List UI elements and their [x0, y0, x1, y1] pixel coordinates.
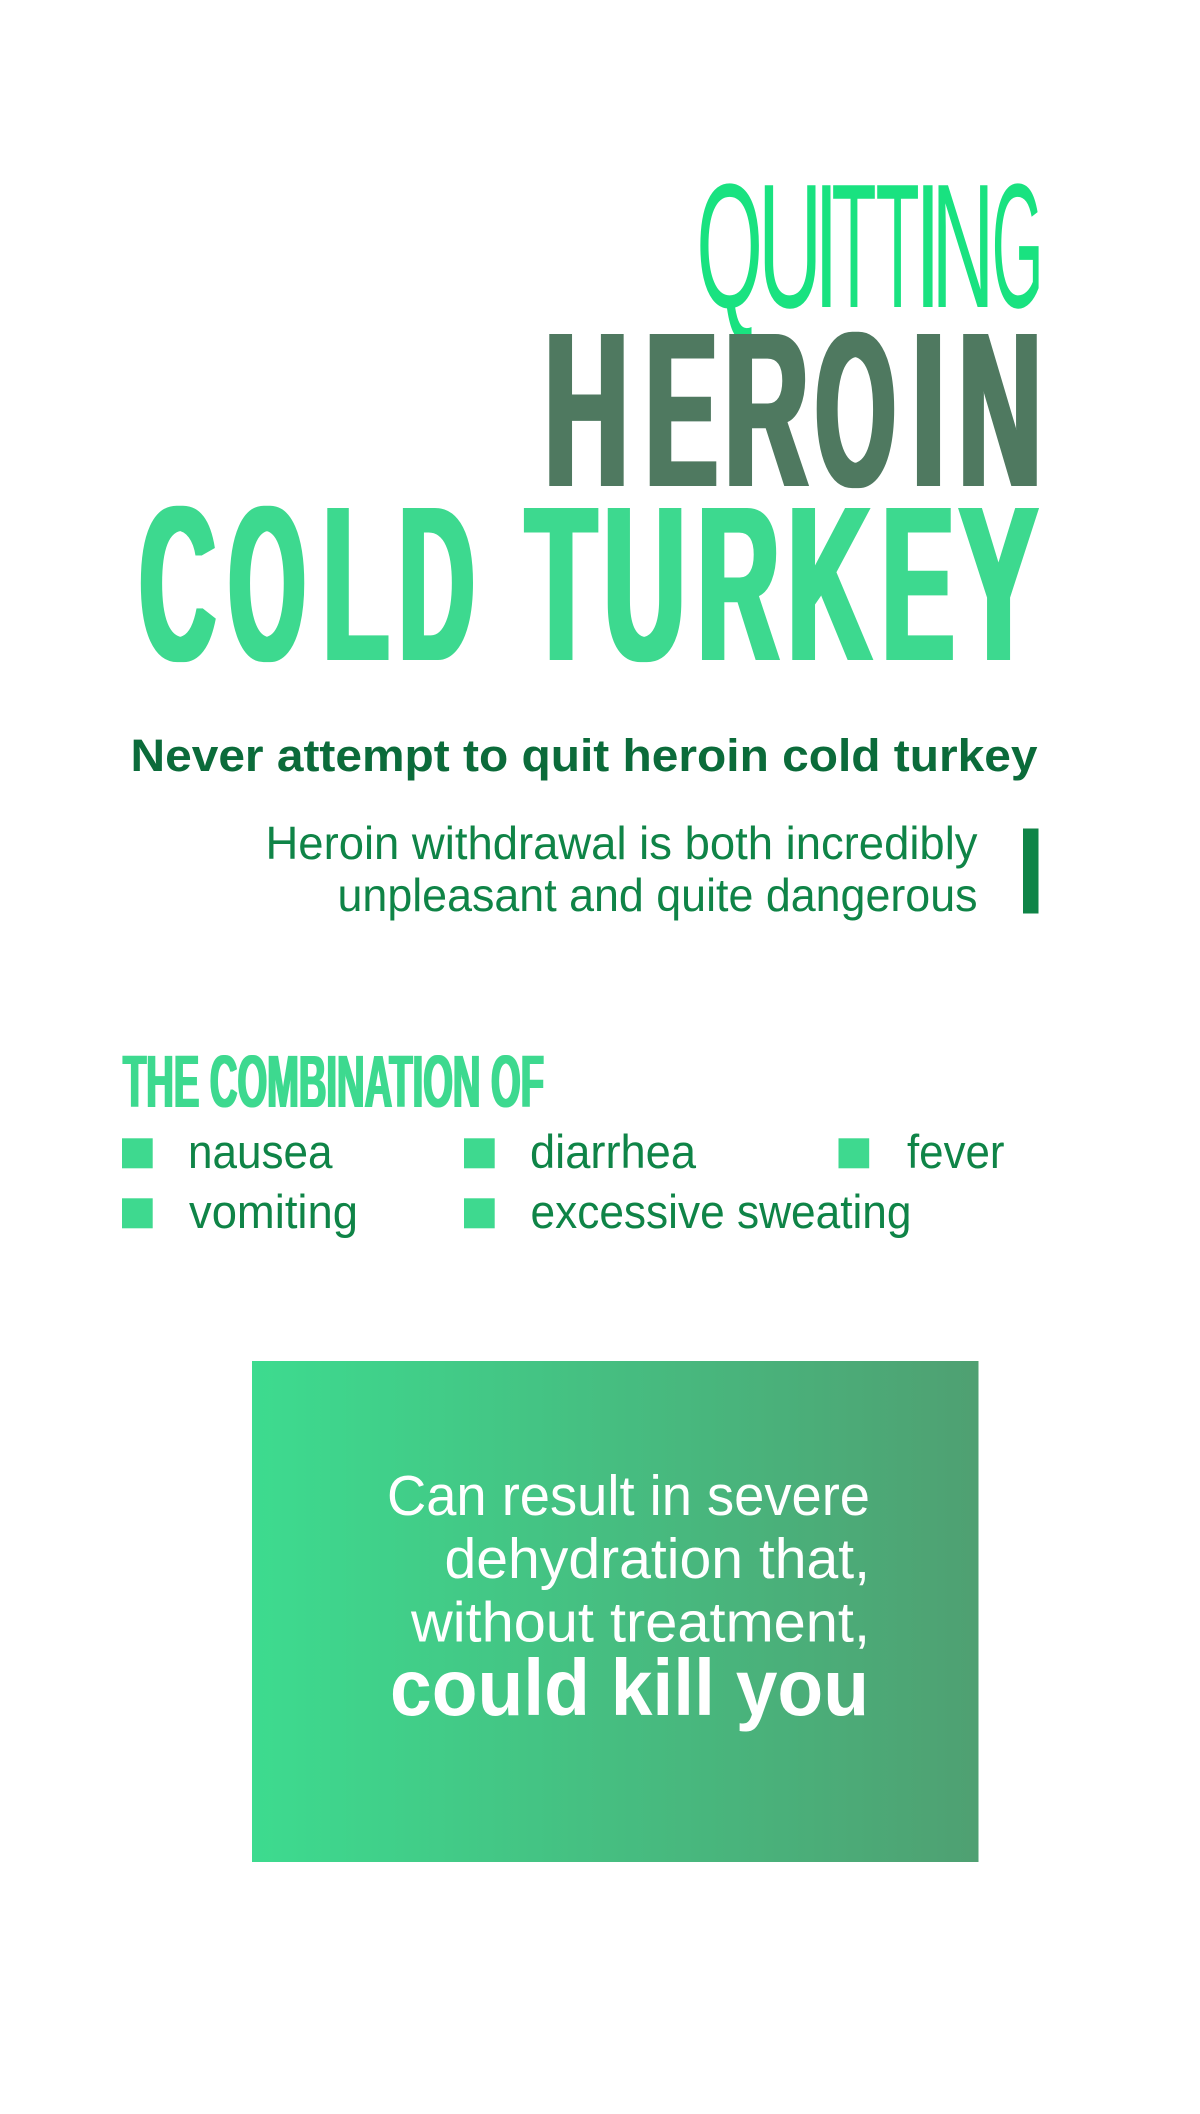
- title: Cold Turkey: U: [604, 460, 685, 707]
- title: Heroin: R: [724, 286, 808, 533]
- title: Cold Turkey: K: [788, 460, 872, 707]
- title: Cold Turkey: Y: [959, 460, 1038, 707]
- text block: withdrawal description: [266, 817, 978, 921]
- callout text: dehydration that,: [444, 1527, 870, 1591]
- symptom list: [122, 1125, 1004, 1238]
- heading: the combination of: THE COMBINATION OF: [123, 1040, 544, 1123]
- title: Quitting: Q: [696, 147, 763, 345]
- text: G: [992, 147, 1044, 345]
- title: Quitting: I: [814, 147, 839, 345]
- title: Quitting: [696, 147, 1044, 345]
- panel: warning callout: [252, 1361, 978, 1862]
- title: Cold Turkey: E: [882, 460, 954, 707]
- title: Quitting: T: [832, 147, 876, 345]
- callout text: [387, 1464, 870, 1732]
- text block: withdrawal description: Heroin withdrawal is both incredibly: [266, 817, 978, 869]
- title: Heroin: E: [646, 286, 718, 533]
- title: Cold Turkey: D: [399, 460, 474, 707]
- title: Quitting: I: [914, 147, 942, 345]
- callout text: could kill you: [390, 1643, 869, 1732]
- symptom: diarrhea: [464, 1125, 697, 1178]
- title: Heroin: O: [816, 286, 896, 533]
- symptom: nausea: [122, 1125, 333, 1178]
- accent bar: [1023, 828, 1038, 914]
- title: Cold Turkey: C: [140, 460, 216, 707]
- title: Heroin: H: [544, 286, 628, 533]
- text block: withdrawal description: unpleasant and quite dangerous: [338, 869, 978, 921]
- title: Cold Turkey: L: [323, 460, 389, 707]
- symptom: fever: fever: [907, 1125, 1004, 1178]
- symptom: excessive sweating: excessive sweating: [530, 1185, 912, 1238]
- title: Heroin: [544, 286, 1042, 533]
- title: Cold Turkey: R: [697, 460, 779, 707]
- title: Cold Turkey: [140, 460, 1038, 707]
- symptom: fever: [838, 1125, 1004, 1178]
- title: Quitting: N: [931, 147, 995, 345]
- callout text: without treatment,: [410, 1590, 870, 1654]
- title: Cold Turkey: T: [526, 460, 597, 707]
- title: Quitting: T: [876, 147, 920, 345]
- title: Cold Turkey: O: [229, 460, 305, 707]
- callout text: Can result in severe: [387, 1464, 870, 1528]
- symptom: vomiting: [122, 1185, 358, 1238]
- title: Heroin: N: [958, 286, 1042, 533]
- symptom: vomiting: vomiting: [189, 1185, 358, 1238]
- title: Quitting: U: [758, 147, 822, 345]
- symptom: diarrhea: diarrhea: [530, 1125, 697, 1178]
- symptom: nausea: nausea: [188, 1125, 333, 1178]
- title: Heroin: I: [912, 286, 945, 533]
- subheading: never attempt: Never attempt to quit heroin cold turkey: [130, 730, 1038, 781]
